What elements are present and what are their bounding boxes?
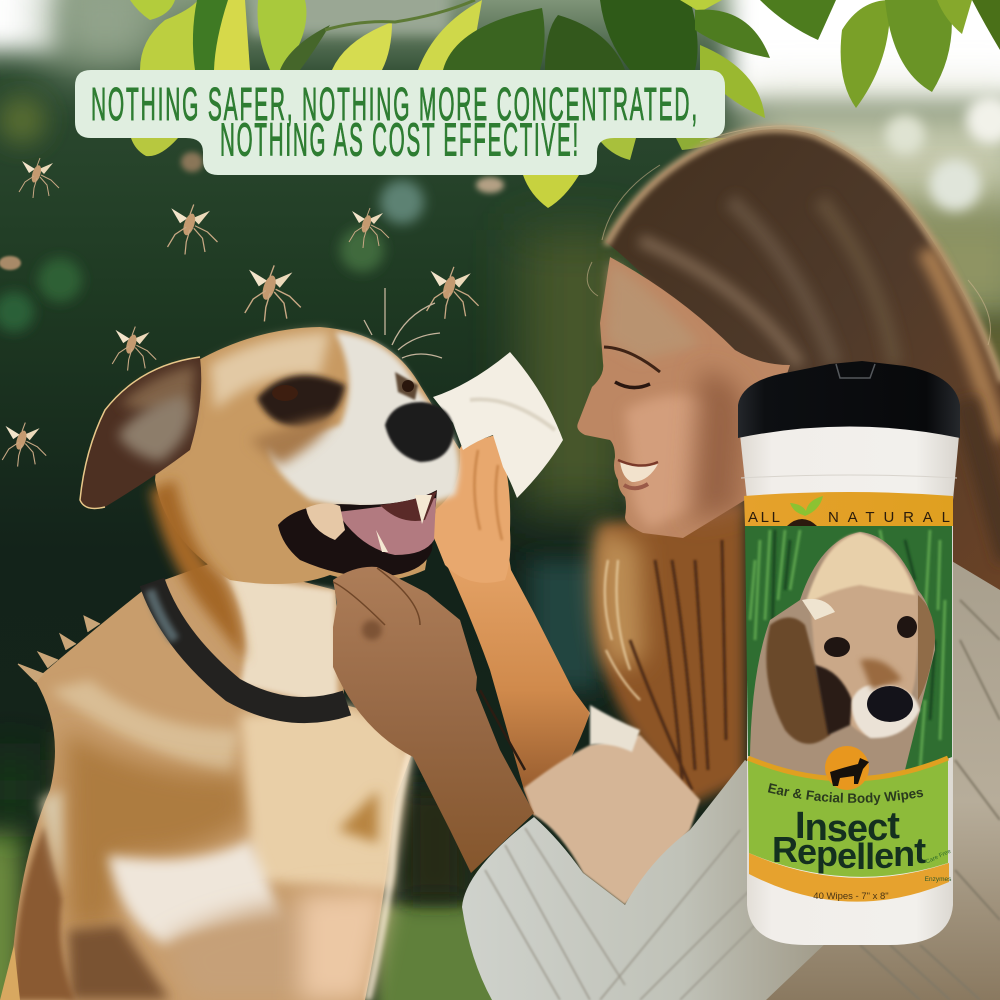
woman: face [577,257,790,538]
dog: open mouth [278,490,437,577]
foliage: leaves at top [130,0,1000,208]
label: dog badge [825,746,869,790]
upper-arm sleeve [462,760,829,1000]
woman: upper hand holding wipe [433,435,510,583]
canister black lid [738,361,960,438]
lace collar [590,705,640,752]
label: orange footer [749,853,949,902]
woman: shirt [462,560,1000,1000]
label: enzymes seal: Enzymes [925,876,952,883]
label: product name line 2: Repellent [772,829,926,877]
woman: hair [587,126,1000,805]
woman: raised arm [430,500,590,816]
woman: lower hand and forearm [333,567,534,873]
dog: nose [385,402,454,462]
headline banner [75,70,725,175]
dog: body [0,560,415,1000]
dog: collar [150,582,347,710]
dog: head [150,327,460,660]
label dog portrait [750,532,935,790]
label: green panel [748,760,948,877]
label: product subtitle: Ear & Facial Body Wipes [768,783,924,806]
label: care free seal: Care Free [925,848,953,866]
canister white body [739,425,960,945]
label: count: 40 Wipes - 7" x 8" [813,891,889,902]
label: product name line 1: Insect [795,805,900,850]
label: grass photo [745,526,952,778]
label: all natural band: ALL [748,509,780,526]
wet wipe [433,352,563,498]
shirt right side [760,560,1000,1000]
dog: ear [80,357,201,508]
label: all natural band: NATURAL [828,509,950,526]
product: wipes canister [738,361,960,945]
mosquitoes [0,152,504,467]
shirt neckline and chest [524,735,700,905]
label: all natural band [744,492,953,526]
